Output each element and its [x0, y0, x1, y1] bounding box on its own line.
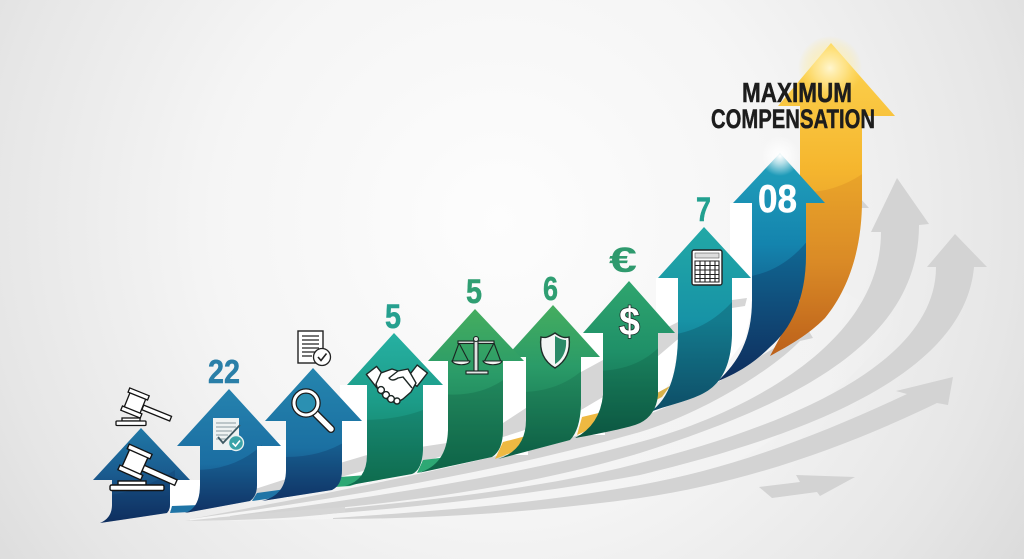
icon: gavel above first arrow [116, 388, 172, 426]
icon: balance scales [452, 336, 502, 374]
arrow 5: green scales [418, 309, 524, 473]
title: maximum compensation: COMPENSATION [711, 104, 875, 134]
icon: checklist document [213, 418, 244, 450]
arrow 1: blue gavel [93, 428, 190, 523]
icon: magnifier [294, 391, 331, 429]
euro symbol: € [609, 241, 637, 280]
number 7: 7 [696, 191, 711, 229]
number 22: 22 [208, 353, 240, 390]
arrow 6: green shield [498, 305, 600, 459]
icon: gavel on arrow [110, 444, 177, 490]
arrow 10: gold maximum [770, 38, 895, 356]
grey arrow swoosh behind arrows [190, 328, 813, 519]
grey arrow tip behind gold arrow [860, 198, 869, 208]
white gaps between arrows [168, 203, 754, 510]
icon: document with check [298, 331, 330, 366]
light stripes behind grey swooshes [190, 290, 900, 521]
grey arrow swoosh 2 [250, 234, 987, 519]
arrow 9: blue 08 [718, 152, 825, 381]
glow: gold arrow tip [798, 36, 862, 100]
ribbon tails [170, 386, 670, 513]
arrow 7: green dollar [576, 281, 675, 438]
arrow 4: teal handshake [346, 333, 443, 486]
number 5 teal: 5 [385, 298, 401, 336]
glow: blue arrow tip [760, 136, 800, 176]
grey band behind arrows [190, 298, 747, 512]
arrow 3: blue magnifier [260, 365, 365, 505]
arrow 8: teal calculator [653, 227, 751, 411]
number 6: 6 [543, 270, 558, 307]
icon: dollar sign: $ [619, 300, 640, 344]
grey lower streak [185, 507, 345, 521]
grey arrow swoosh 1 [230, 178, 929, 517]
title: maximum compensation: MAXIMUM [742, 77, 852, 108]
number 08: 08 [758, 178, 797, 221]
icon: calculator [692, 250, 722, 285]
icon: handshake [366, 365, 427, 404]
title: maximum compensation [711, 77, 875, 134]
arrow 2: blue checklist [175, 386, 285, 516]
small grey arrow [759, 475, 855, 498]
number 5 green: 5 [466, 273, 482, 311]
grey arrow swoosh 3 [333, 377, 953, 519]
icon: shield [541, 333, 569, 368]
